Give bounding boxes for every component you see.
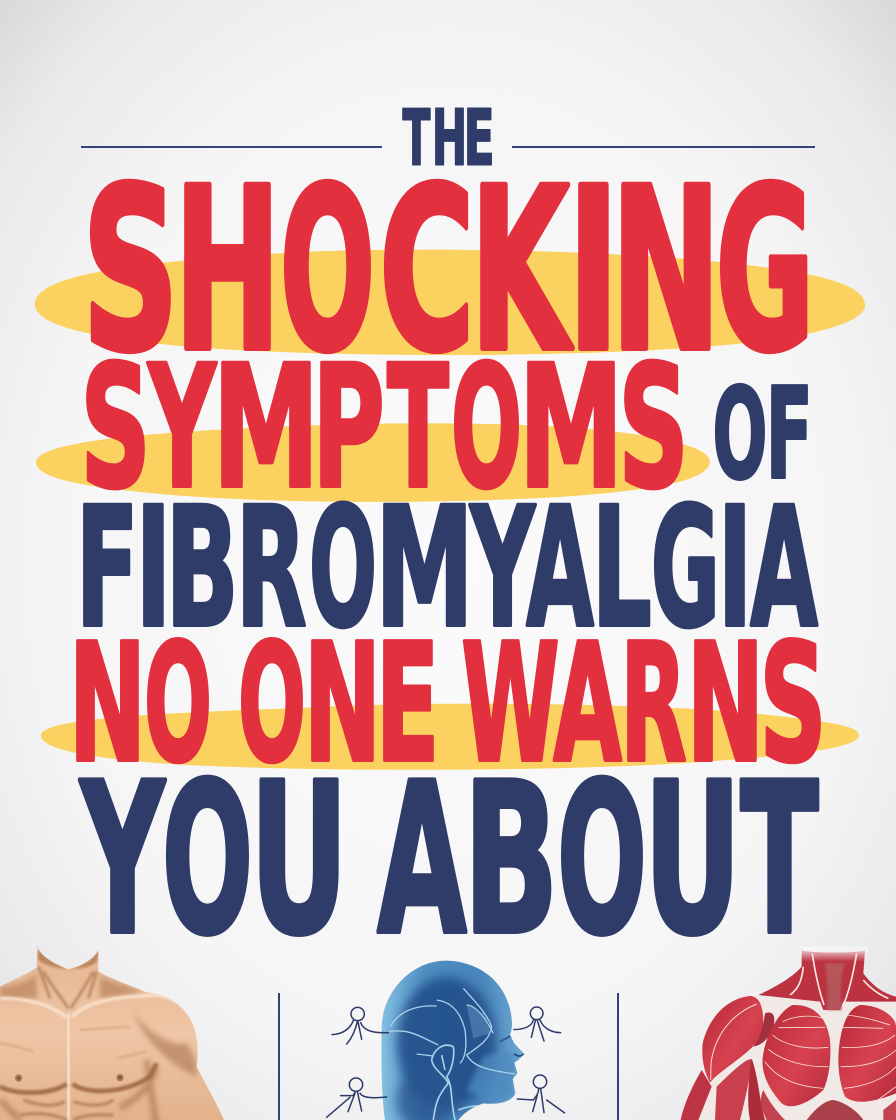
heading word: FIBROMYALGIA: I bbox=[718, 472, 752, 664]
heading word: THE: H bbox=[432, 94, 467, 184]
heading word: SHOCKING: O bbox=[280, 140, 375, 401]
deltoid bbox=[702, 996, 763, 1083]
highlight: SHOCKING bbox=[35, 250, 865, 355]
heading phrase: YOU ABOUT: O bbox=[162, 740, 253, 982]
heading word: FIBROMYALGIA: O bbox=[309, 472, 377, 664]
heading word: SHOCKING: S bbox=[82, 140, 179, 401]
heading word: FIBROMYALGIA: I bbox=[135, 472, 172, 664]
illustration: red muscles bbox=[681, 947, 896, 1120]
nerve icon: top right bbox=[514, 1007, 561, 1041]
heading word: FIBROMYALGIA: Y bbox=[469, 472, 536, 664]
heading phrase: YOU ABOUT: B bbox=[463, 740, 559, 982]
heading phrase: NO ONE WARNS: N bbox=[687, 610, 764, 799]
heading phrase: NO ONE WARNS: S bbox=[760, 610, 826, 799]
heading phrase: YOU ABOUT: A bbox=[377, 740, 467, 982]
heading phrase: NO ONE WARNS: N bbox=[304, 610, 381, 799]
heading phrase: NO ONE WARNS: A bbox=[553, 610, 622, 799]
rule: left of THE bbox=[81, 146, 382, 148]
arm muscles bbox=[681, 1070, 712, 1120]
divider right bbox=[617, 993, 619, 1120]
highlight: SYMPTOMS bbox=[36, 423, 710, 502]
heading word: OF: O bbox=[712, 360, 767, 508]
heading word: FIBROMYALGIA: G bbox=[651, 472, 720, 664]
heading word: SYMPTOMS: M bbox=[519, 329, 623, 526]
fascia base bbox=[682, 995, 896, 1120]
heading word: FIBROMYALGIA: M bbox=[375, 472, 474, 664]
nerve icon: bottom left bbox=[327, 1078, 387, 1117]
heading phrase: YOU ABOUT: U bbox=[250, 740, 348, 982]
heading word: SYMPTOMS: S bbox=[80, 329, 151, 526]
heading phrase: YOU ABOUT: O bbox=[557, 740, 647, 982]
heading word: SYMPTOMS: T bbox=[387, 329, 449, 526]
nerve icon: bottom right bbox=[517, 1075, 565, 1113]
heading word: THE: T bbox=[402, 94, 431, 184]
heading word: FIBROMYALGIA: L bbox=[592, 472, 652, 664]
heading phrase: YOU ABOUT: U bbox=[644, 740, 741, 982]
left pectoral bbox=[762, 1005, 830, 1106]
heading word: SHOCKING: K bbox=[470, 140, 574, 401]
heading word: SHOCKING: I bbox=[567, 140, 620, 401]
divider left bbox=[278, 993, 280, 1120]
heading word: OF: F bbox=[766, 360, 813, 508]
lower abdomen bbox=[807, 1100, 863, 1120]
head shading and nerves bbox=[388, 977, 524, 1120]
illustration: blue head with nerves bbox=[327, 961, 565, 1120]
neck muscles bbox=[758, 950, 896, 1010]
heading phrase: YOU ABOUT: Y bbox=[79, 740, 166, 982]
heading word: SYMPTOMS: S bbox=[618, 329, 689, 526]
heading phrase: NO ONE WARNS: O bbox=[144, 610, 212, 799]
heading word: SYMPTOMS: O bbox=[451, 329, 522, 526]
heading word: FIBROMYALGIA: F bbox=[76, 472, 139, 664]
heading phrase: YOU ABOUT: T bbox=[740, 740, 819, 982]
muscle fibres bbox=[762, 1015, 896, 1110]
heading phrase: NO ONE WARNS: W bbox=[461, 610, 560, 799]
heading word: FIBROMYALGIA: A bbox=[750, 472, 818, 664]
heading word: THE: E bbox=[464, 94, 495, 184]
heading word: FIBROMYALGIA: R bbox=[236, 472, 307, 664]
heading word: FIBROMYALGIA: A bbox=[526, 472, 594, 664]
heading word: SYMPTOMS: P bbox=[312, 329, 385, 526]
heading word: SHOCKING: H bbox=[174, 140, 281, 401]
highlight: NO ONE WARNS bbox=[41, 704, 859, 770]
right pectoral bbox=[838, 1005, 896, 1102]
heading word: SHOCKING: G bbox=[716, 140, 815, 401]
title block bbox=[35, 94, 865, 982]
heading phrase: NO ONE WARNS: R bbox=[620, 610, 687, 799]
heading phrase: NO ONE WARNS: O bbox=[238, 610, 306, 799]
nerve icon: top left bbox=[332, 1007, 388, 1044]
heading word: FIBROMYALGIA: B bbox=[166, 472, 239, 664]
heading word: SHOCKING: N bbox=[611, 140, 721, 401]
illustration: bare torso bbox=[0, 943, 224, 1120]
heading phrase: NO ONE WARNS: E bbox=[376, 610, 440, 799]
heading word: SYMPTOMS: Y bbox=[147, 329, 217, 526]
rule: right of THE bbox=[512, 146, 815, 148]
nerve icons bbox=[327, 1007, 565, 1117]
heading phrase: NO ONE WARNS: N bbox=[69, 610, 146, 799]
head silhouette bbox=[381, 961, 524, 1120]
heading word: SHOCKING: C bbox=[379, 140, 475, 401]
heading word: SYMPTOMS: M bbox=[213, 329, 319, 526]
